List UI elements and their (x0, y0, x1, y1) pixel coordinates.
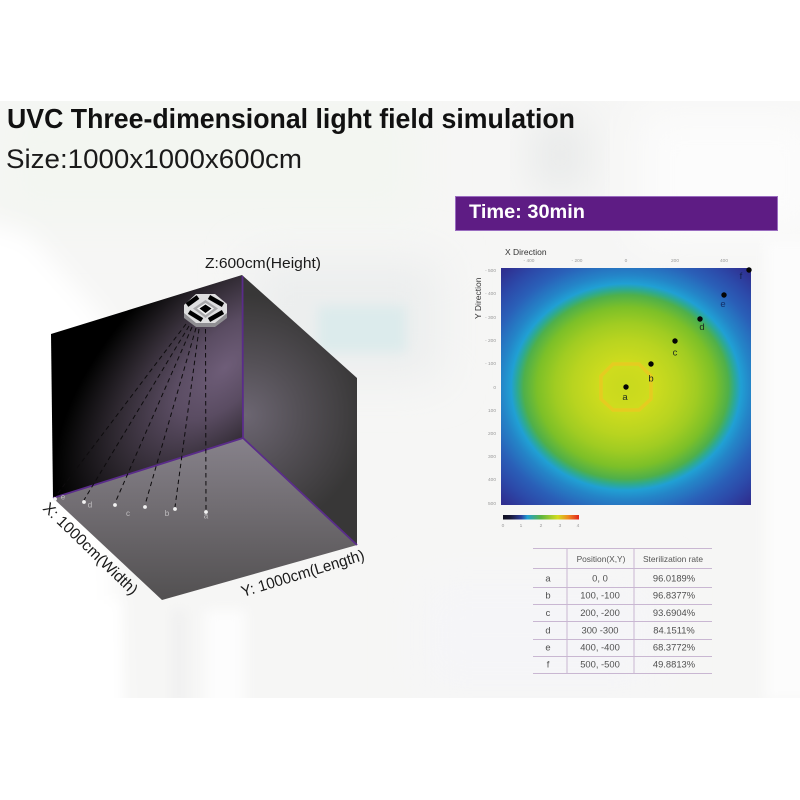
time banner: Time: 30min (469, 201, 585, 223)
table rows: 300 -300 (581, 624, 619, 636)
table rows: a (545, 572, 551, 584)
y ticks: 400 (488, 477, 496, 483)
table rows: d (545, 624, 551, 636)
x ticks: 400 (720, 258, 728, 264)
x ticks: 200 (671, 258, 679, 264)
3D room simulation (51, 275, 357, 600)
table rows: f (547, 658, 550, 670)
table rows: 100, -100 (580, 590, 620, 600)
floor (53, 438, 357, 600)
colour scale legend (502, 515, 580, 529)
x ticks: - 200 (572, 258, 583, 264)
table rows: 93.6904% (653, 607, 695, 618)
table rows: 68.3772% (653, 642, 695, 652)
right wall (242, 275, 357, 545)
orange ring (601, 364, 651, 410)
point labels: b (165, 509, 170, 518)
colour scale legend: 3 (559, 523, 562, 529)
marker labels: a (622, 392, 628, 403)
title: UVC Three-dimensional light field simulation (7, 103, 575, 134)
subtitle: size: Size:1000x1000x600cm (6, 144, 302, 174)
y ticks: - 100 (485, 361, 496, 367)
y ticks: 0 (493, 385, 496, 391)
purple edges (53, 276, 357, 545)
blurred hospital background (0, 101, 800, 720)
table rows (545, 572, 695, 670)
table rows: 96.0189% (653, 572, 695, 584)
x ticks: - 400 (524, 258, 535, 264)
y ticks: 100 (488, 408, 496, 414)
time banner (456, 196, 778, 230)
table rows: 84.1511% (653, 624, 695, 636)
marker labels: b (648, 374, 654, 384)
marker labels: c (673, 348, 678, 358)
colour scale legend: 2 (540, 523, 543, 529)
icon: UVC lamp (184, 294, 227, 327)
table header (577, 554, 703, 564)
dashed light rays (55, 324, 206, 510)
axis label: X: X: 1000cm(Width) (39, 500, 141, 599)
point labels: d (88, 500, 92, 510)
x axis title: X Direction (505, 247, 547, 257)
heatmap chart (473, 247, 752, 507)
x ticks (524, 258, 728, 264)
left wall (51, 275, 243, 498)
point labels (61, 492, 209, 520)
marker labels: e (720, 299, 726, 310)
point labels: c (126, 509, 130, 518)
table header: Sterilization rate (643, 554, 703, 564)
table header: Position(X,Y) (577, 554, 626, 564)
sterilization table (533, 548, 712, 674)
marker labels (622, 271, 743, 403)
colour scale legend: 0 (502, 523, 505, 529)
y ticks: - 500 (485, 268, 496, 274)
y ticks: 500 (488, 501, 496, 507)
y ticks: - 400 (485, 291, 496, 297)
marker labels: f (740, 271, 743, 282)
point labels: e (61, 492, 66, 502)
markers (623, 267, 752, 390)
measurement points (53, 497, 208, 514)
y axis title: Y Direction (473, 277, 483, 319)
heatmap field (501, 268, 751, 505)
marker labels: d (699, 322, 705, 333)
colour scale legend: 1 (520, 523, 523, 529)
table rows: 96.8377% (653, 590, 695, 600)
axis label: Z: Z:600cm(Height) (205, 256, 321, 272)
table rows: 200, -200 (580, 607, 620, 618)
table rows: 0, 0 (592, 572, 608, 584)
table rows: e (545, 642, 551, 652)
axis label: Y: Y: 1000cm(Length) (239, 547, 367, 601)
table rows: c (546, 607, 551, 618)
colour scale legend: 4 (577, 523, 580, 529)
y ticks: - 200 (485, 338, 496, 344)
x ticks: 0 (625, 258, 628, 264)
table rows: 500, -500 (580, 658, 620, 670)
table rows: 400, -400 (580, 642, 620, 652)
y ticks: - 300 (485, 315, 496, 321)
y ticks (485, 268, 496, 507)
y ticks: 200 (488, 431, 496, 437)
table rows: b (545, 590, 551, 600)
point labels: a (204, 512, 209, 520)
table rows: 49.8813% (653, 658, 695, 670)
y ticks: 300 (488, 454, 496, 460)
